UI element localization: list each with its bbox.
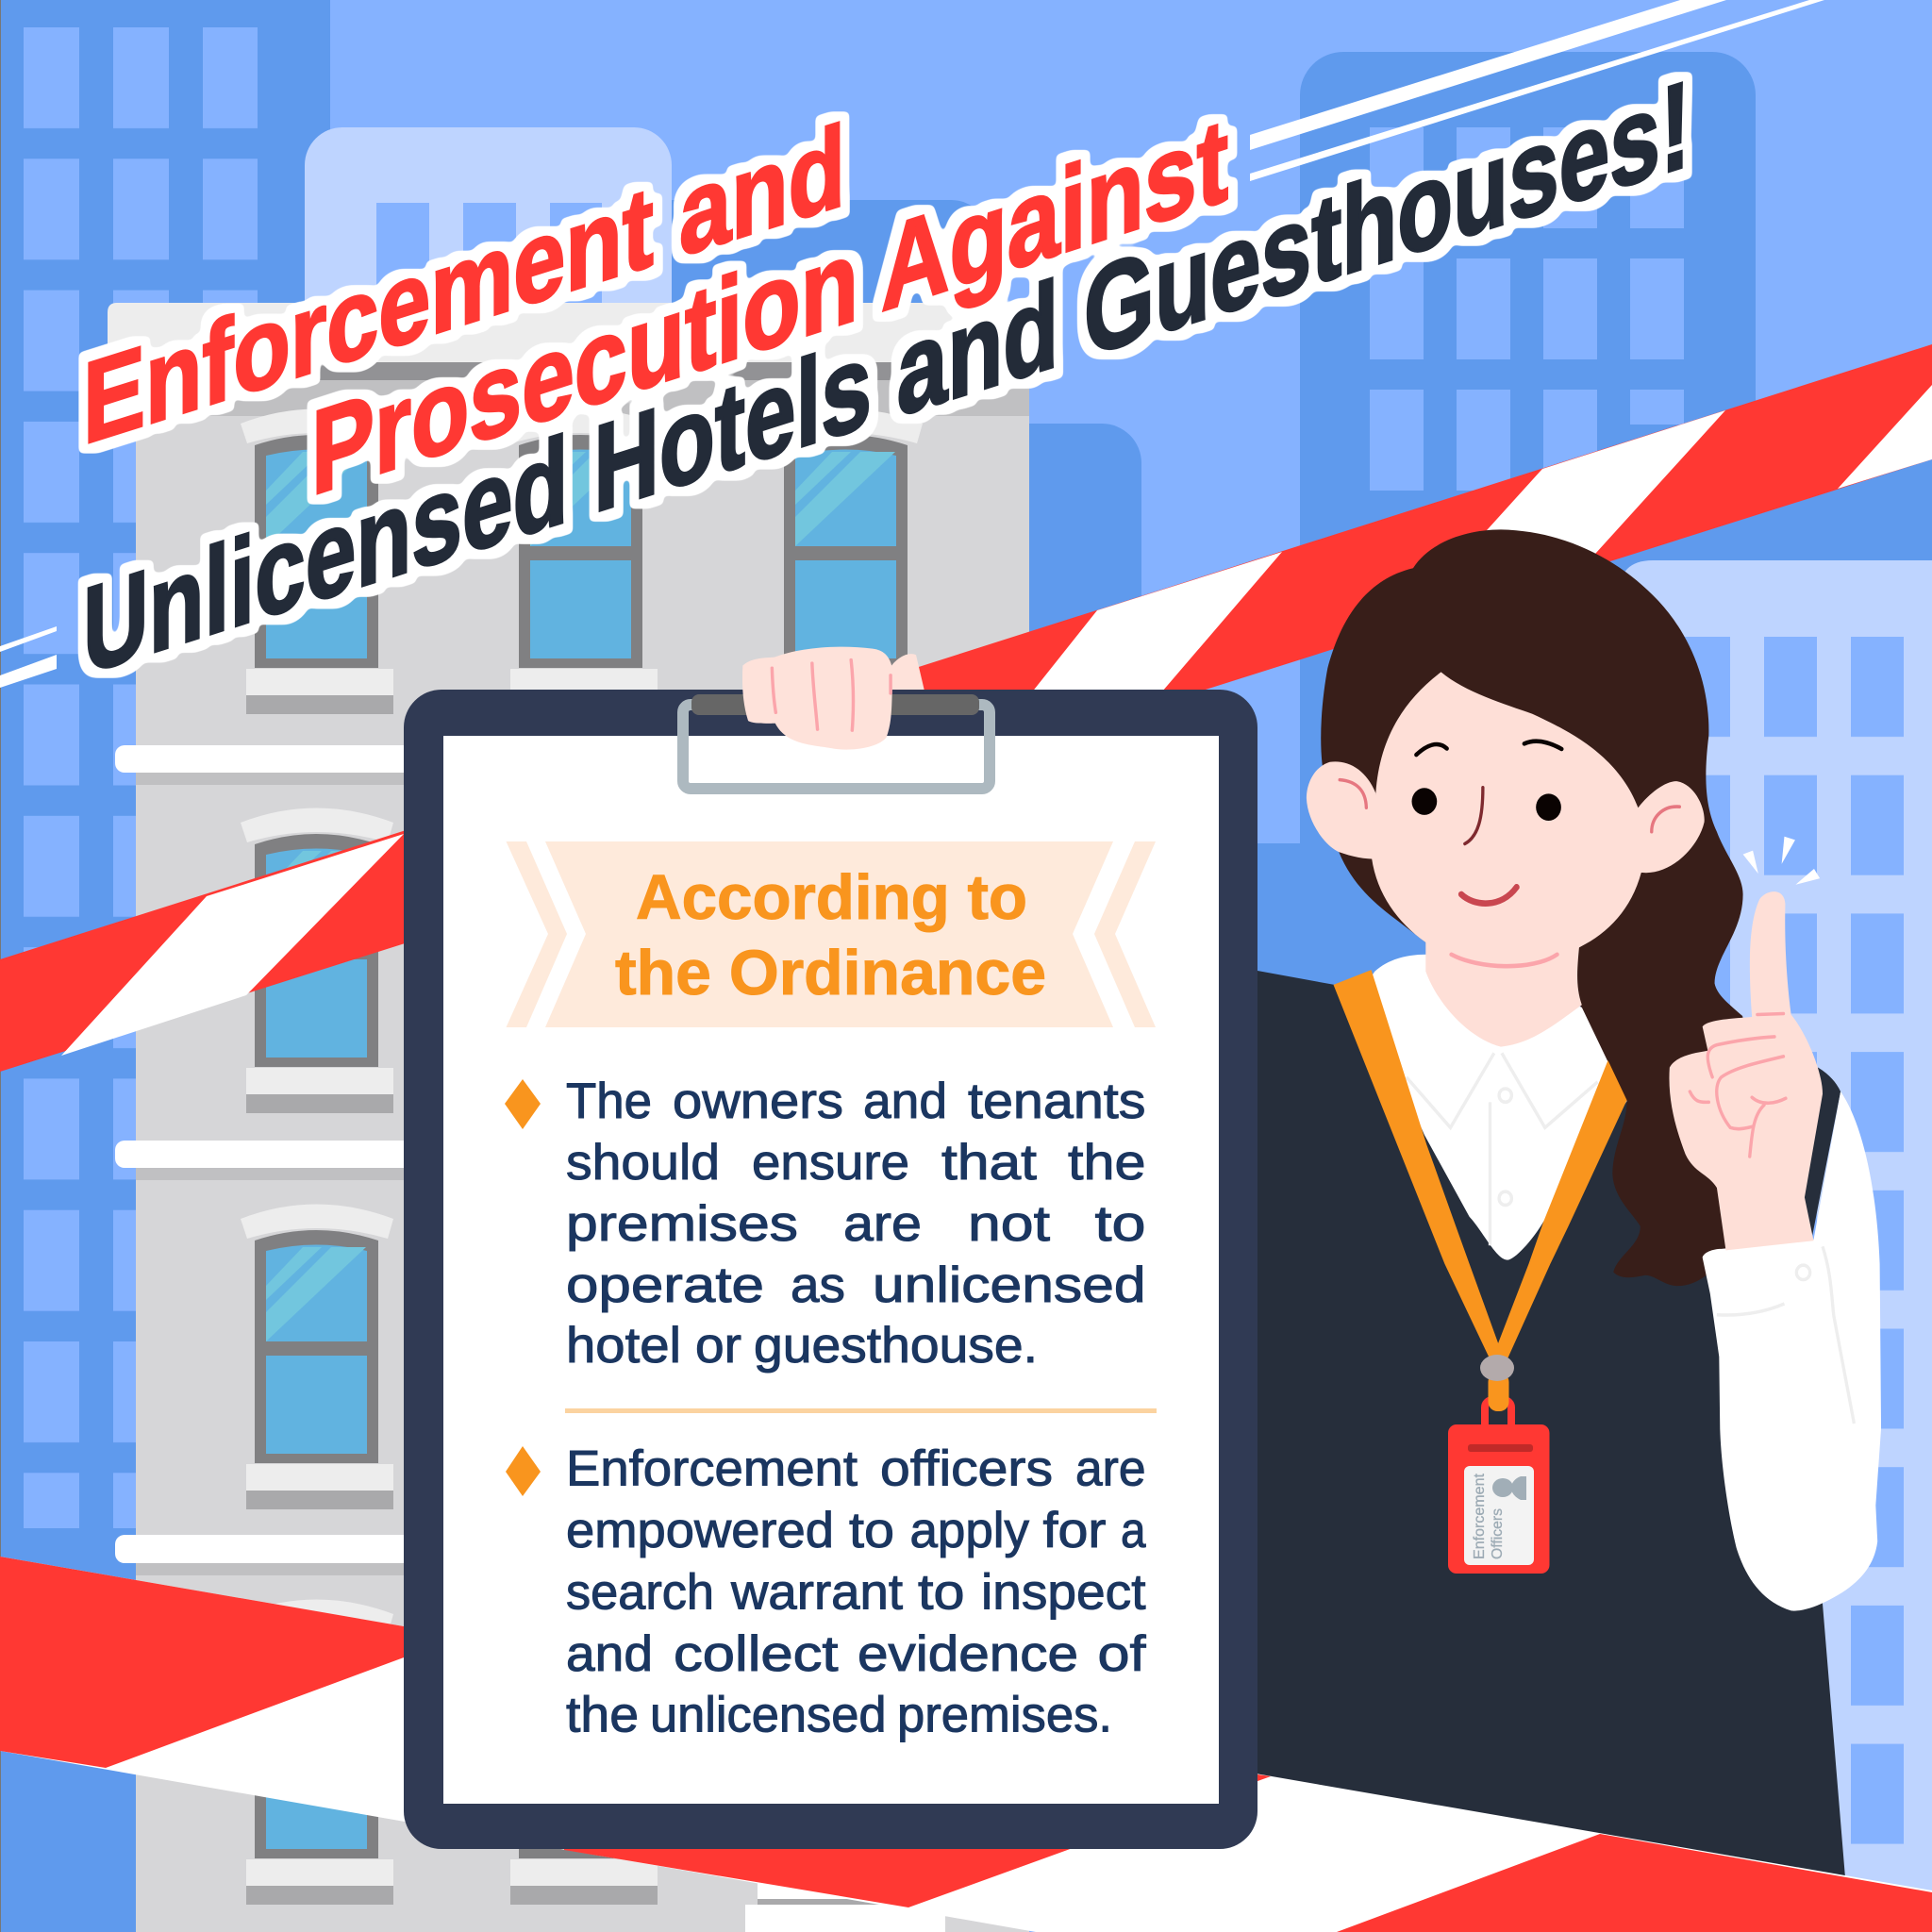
paragraph 2: for (1043, 1503, 1106, 1558)
clipboard (404, 647, 1257, 1849)
paragraph 2: warrant (730, 1564, 903, 1621)
paragraph 2 (566, 1441, 1146, 1743)
title (83, 54, 1690, 701)
badge label: Enforcement (1472, 1473, 1488, 1559)
paragraph 2: inspect (981, 1564, 1146, 1621)
paragraph 2: officers (880, 1441, 1053, 1496)
paragraph 1: as (791, 1257, 845, 1313)
caution tape: lower band (0, 1557, 1932, 1932)
paragraph 2: apply (909, 1503, 1029, 1558)
paragraph 1: the (1068, 1135, 1145, 1191)
paragraph 1: should (566, 1135, 720, 1191)
ears (1307, 761, 1705, 873)
bullet diamond 2 (506, 1446, 541, 1496)
bullet diamond 1 (505, 1079, 541, 1129)
clipboard board (404, 690, 1257, 1849)
lanyard (1334, 970, 1627, 1358)
sleeve details (1717, 1246, 1854, 1424)
raised hand (1669, 891, 1823, 1250)
paragraph 2: a (1121, 1503, 1146, 1558)
sparkle marks (1743, 837, 1820, 885)
paragraph 1: The (566, 1074, 652, 1129)
gripping hand (742, 647, 924, 750)
paragraph 2: to (849, 1503, 894, 1558)
hand lines (1690, 1013, 1786, 1157)
grey hotel building (108, 303, 1029, 1932)
paragraph 2: premises. (897, 1687, 1112, 1743)
paragraph 1: operate (566, 1257, 764, 1313)
paragraph 2: and (566, 1626, 653, 1682)
paragraph 1: owners (673, 1074, 843, 1129)
paragraph 1: premises (566, 1196, 798, 1252)
paragraph 1: unlicensed (873, 1257, 1145, 1313)
face (1372, 672, 1641, 958)
paragraph 2: the (566, 1687, 639, 1743)
speed lines (0, 0, 1824, 688)
woman officer (1181, 529, 1881, 1914)
paragraph 1 (566, 1074, 1145, 1374)
banner: According to the Ordinance (506, 841, 1156, 1027)
paragraph 2: Enforcement (566, 1441, 858, 1496)
caution tape: upper band (0, 344, 1932, 1072)
hair (1321, 529, 1766, 1286)
title line 1: Enforcement and (83, 101, 845, 469)
badge portrait icon (1492, 1476, 1526, 1500)
badge label: Officers (1490, 1508, 1506, 1559)
metal clip (683, 694, 990, 789)
neck (1425, 933, 1582, 1047)
banner heading: the Ordinance (615, 938, 1046, 1008)
hotel windows (241, 409, 945, 1932)
paragraph 1: or (695, 1318, 741, 1374)
building: middle blue (566, 200, 1141, 895)
paragraph 1: tenants (968, 1074, 1145, 1129)
paragraph 2: to (918, 1564, 964, 1621)
paragraph 2: evidence (858, 1626, 1078, 1682)
paragraph 1: are (843, 1196, 922, 1252)
paragraph 2: search (566, 1564, 714, 1621)
building: pale blue behind hotel (305, 127, 672, 505)
shirt (1361, 955, 1627, 1260)
paragraph 2: empowered (566, 1503, 834, 1558)
vest (1181, 957, 1845, 1914)
paragraph 2: are (1075, 1441, 1145, 1496)
paragraph 1: to (1094, 1196, 1145, 1252)
badge label (1472, 1473, 1506, 1559)
paragraph 2: unlicensed (650, 1687, 887, 1743)
floor ledges (115, 745, 419, 1575)
paragraph 1: ensure (752, 1135, 909, 1191)
shirt collar and buttons (1407, 1053, 1598, 1245)
paper sheet (443, 736, 1219, 1804)
paragraph 1: not (968, 1196, 1050, 1252)
paragraph 2: collect (674, 1626, 839, 1682)
building: right pale blue (1619, 560, 1932, 1932)
divider (565, 1408, 1157, 1413)
paragraph 2: of (1098, 1626, 1146, 1682)
banner heading (615, 862, 1046, 1008)
paragraph 1: guesthouse. (754, 1318, 1038, 1374)
sleeve (1703, 1091, 1881, 1611)
facial features (1340, 741, 1679, 966)
title line 2: Prosecution Against (311, 92, 1228, 521)
building: left tall blue (0, 0, 330, 1932)
lanyard clasp and ID badge (1448, 1355, 1549, 1574)
paragraph 1: hotel (566, 1318, 681, 1374)
banner heading: According to (636, 862, 1027, 933)
building: right tall blue (1257, 52, 1932, 1221)
paragraph 1: that (941, 1135, 1037, 1191)
paragraph 1: and (863, 1074, 947, 1129)
